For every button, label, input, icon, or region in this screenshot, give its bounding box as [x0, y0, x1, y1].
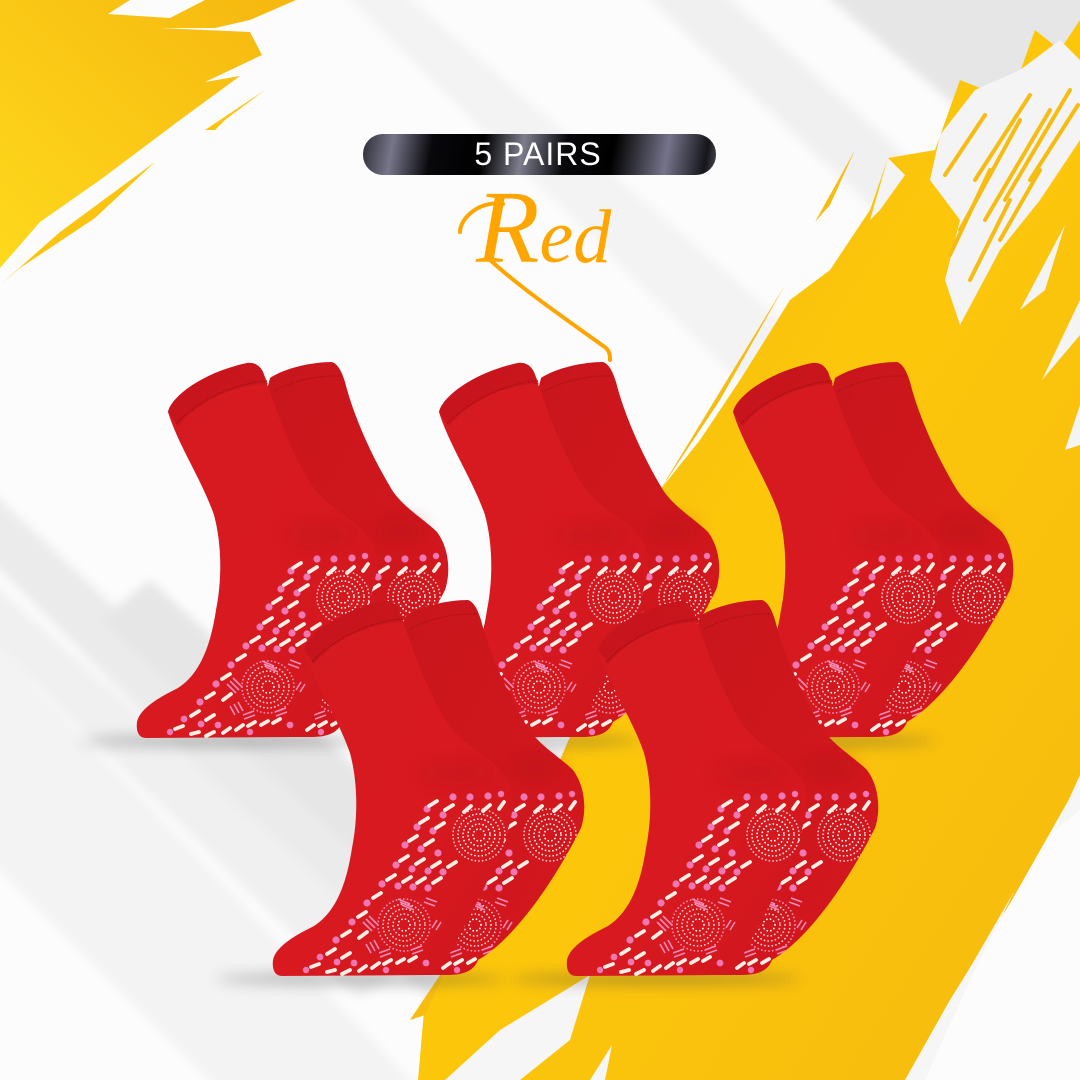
script heading: Red — [460, 170, 612, 360]
white brush streaks: top right — [870, 40, 1080, 450]
pill badge: 5 PAIRS — [474, 136, 602, 172]
socks: pair 5 — [510, 600, 878, 984]
yellow brush stroke: main diagonal — [410, 20, 1080, 1080]
script heading: Red: Red — [475, 170, 612, 285]
socks: pair 4 — [216, 600, 584, 984]
white brush streaks: bottom — [445, 775, 1080, 1080]
socks: pair 1 — [80, 362, 448, 746]
socks: pair 3 — [645, 362, 1013, 746]
yellow flecks within white streaks — [945, 90, 1078, 280]
pill badge — [363, 134, 716, 175]
yellow brush stroke: top left — [0, 0, 296, 285]
socks: pair 2 — [351, 362, 719, 746]
